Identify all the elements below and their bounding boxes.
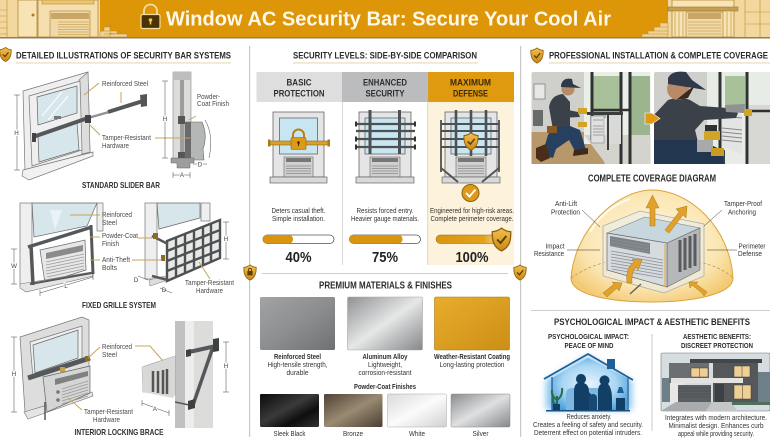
swatch: reinforced steel bbox=[260, 297, 335, 377]
illustration: fixed grille system: L bbox=[64, 283, 68, 290]
block: psychological impact: Reduces anxiety. bbox=[566, 414, 612, 421]
wall and brace bbox=[175, 321, 213, 428]
illustration: fixed grille system: Powder-Coat bbox=[102, 231, 138, 240]
icon: check badge bbox=[462, 184, 479, 202]
callouts: Resistance bbox=[534, 249, 564, 258]
block: psychological impact: Creates a feeling of safety and security. bbox=[533, 422, 643, 429]
illustration: standard slider bar: Tamper-Resistant bbox=[102, 133, 151, 142]
callouts: Anchoring bbox=[728, 208, 756, 216]
illustration: interior locking brace: Steel bbox=[102, 350, 117, 359]
illustration: interior locking brace: Reinforced bbox=[102, 342, 132, 351]
column: basic protection: Simple installation. bbox=[272, 216, 325, 223]
icon: check shield right bbox=[514, 265, 526, 280]
illustration: fixed grille system: D bbox=[134, 277, 139, 284]
title: Window AC Security Bar: Secure Your Cool Air bbox=[166, 8, 611, 30]
block: aesthetic benefits bbox=[661, 332, 770, 438]
illustration: interior locking brace: Hardware bbox=[93, 415, 120, 424]
section view bbox=[173, 72, 191, 160]
callouts: Anti-Lift bbox=[555, 199, 577, 208]
icon: house with family bbox=[544, 354, 633, 412]
block: psychological impact: Deterrent effect on potential intruders. bbox=[534, 430, 642, 437]
labels: Reinforced Steel bbox=[102, 79, 148, 88]
caption: FIXED GRILLE SYSTEM bbox=[82, 300, 156, 310]
swatch: reinforced steel: High-tensile strength, bbox=[268, 362, 328, 369]
right view bbox=[145, 203, 157, 279]
illustration: fixed grille system: Steel bbox=[102, 218, 117, 227]
panel: psychological and aesthetic benefits bbox=[531, 310, 770, 438]
column: basic protection bbox=[256, 72, 342, 266]
callouts: Tamper-Proof bbox=[724, 199, 762, 208]
progress bar: 40% bbox=[263, 235, 334, 244]
illustration: standard slider bar: D bbox=[198, 162, 203, 168]
callouts bbox=[534, 199, 766, 258]
heading: materials: PREMIUM MATERIALS & FINISHES bbox=[319, 280, 452, 292]
callouts: Perimeter bbox=[738, 242, 766, 250]
icon: window with bars bbox=[356, 110, 415, 183]
progress bar: 75% bbox=[350, 235, 420, 244]
callouts: Protection bbox=[551, 208, 580, 216]
heading: coverage diagram: COMPLETE COVERAGE DIAGRAM bbox=[588, 174, 716, 184]
column: enhanced security: Heavier gauge materials. bbox=[351, 216, 419, 223]
illustration: standard slider bar: H bbox=[14, 130, 19, 137]
finish: white bbox=[388, 394, 446, 438]
illustration: interior locking brace: H bbox=[12, 371, 16, 378]
illustration: fixed grille system: Anti-Theft bbox=[102, 255, 130, 264]
illustration: fixed grille system: W bbox=[11, 263, 17, 270]
icon: header padlock bbox=[141, 4, 160, 28]
column: enhanced security: Resists forced entry. bbox=[356, 208, 414, 215]
chart: coverage dome diagram bbox=[534, 190, 766, 302]
column: maximum defense: Complete perimeter coverage. bbox=[430, 216, 514, 223]
finish: silver: Silver bbox=[472, 431, 489, 438]
block: aesthetic benefits: DISCREET PROTECTION bbox=[681, 341, 753, 350]
illustration: modern house bbox=[661, 353, 770, 411]
column: basic protection: BASIC bbox=[286, 78, 312, 88]
illustration: fixed grille system: Bolts bbox=[102, 263, 117, 272]
illustration: fixed grille system: Tamper-Resistant bbox=[185, 278, 234, 287]
column: basic protection: PROTECTION bbox=[274, 88, 324, 98]
swatch: aluminum alloy: Aluminum Alloy bbox=[362, 352, 408, 361]
swatch: aluminum alloy: corrosion-resistant bbox=[358, 370, 412, 377]
swatch: aluminum alloy bbox=[348, 297, 422, 377]
subheading: powder-coat finishes: Powder-Coat Finishes bbox=[354, 382, 416, 391]
column: maximum defense: DEFENSE bbox=[453, 88, 488, 98]
column: enhanced security: 75% bbox=[372, 250, 398, 266]
block: psychological impact: PSYCHOLOGICAL IMPACT: bbox=[548, 332, 629, 341]
icon: window with padlock bbox=[268, 112, 330, 183]
progress bar: 100% bbox=[436, 228, 511, 251]
swatch: weather-resistant coating: Weather-Resistant Coating bbox=[434, 352, 510, 361]
illustration: standard slider bar: H bbox=[163, 116, 167, 123]
header illustration: left house bbox=[0, 0, 127, 37]
panel: security levels comparison bbox=[256, 50, 514, 266]
heading: security levels: SECURITY LEVELS: SIDE-BY-SIDE COMPARISON bbox=[293, 50, 477, 62]
header banner bbox=[0, 0, 770, 38]
illustration: fixed grille system: Finish bbox=[102, 239, 119, 248]
column: enhanced security: SECURITY bbox=[366, 88, 404, 98]
illustration: fixed grille system bbox=[11, 203, 234, 310]
swatch: weather-resistant coating bbox=[434, 297, 510, 369]
caption: STANDARD SLIDER BAR bbox=[82, 180, 160, 190]
illustration: standard slider bar: A bbox=[180, 172, 185, 179]
column: basic protection: 40% bbox=[286, 250, 312, 266]
illustration: fixed grille system: Reinforced bbox=[102, 210, 132, 219]
column: enhanced security bbox=[342, 72, 428, 266]
photo: close-up of bar fastening bbox=[654, 72, 770, 164]
illustration: fixed grille system: D bbox=[162, 287, 167, 294]
panel: professional installation bbox=[531, 48, 770, 302]
photo: technician installing bar bbox=[532, 72, 650, 164]
caption: INTERIOR LOCKING BRACE bbox=[74, 427, 164, 437]
block: aesthetic benefits: AESTHETIC BENEFITS: bbox=[683, 332, 751, 341]
illustration: standard slider bar: Hardware bbox=[102, 141, 129, 150]
column: maximum defense bbox=[428, 72, 514, 266]
icon: shield check bbox=[531, 48, 543, 63]
column: enhanced security: ENHANCED bbox=[363, 78, 407, 88]
callouts: Impact bbox=[546, 242, 564, 250]
column: maximum defense: MAXIMUM bbox=[450, 78, 491, 88]
panel: detailed illustrations bbox=[0, 47, 234, 437]
illustration: interior locking brace: A bbox=[153, 406, 158, 413]
illustration: interior locking brace bbox=[11, 317, 229, 437]
column: maximum defense: 100% bbox=[456, 250, 489, 266]
illustration: interior locking brace: H bbox=[224, 363, 228, 370]
icon: lock shield left bbox=[244, 265, 256, 280]
illustration: standard slider bar bbox=[14, 72, 229, 190]
block: psychological impact bbox=[533, 332, 643, 437]
finish: bronze: Bronze bbox=[343, 431, 363, 438]
block: psychological impact: PEACE OF MIND bbox=[564, 341, 614, 350]
finish: silver bbox=[451, 394, 510, 438]
swatch: reinforced steel: Reinforced Steel bbox=[274, 352, 321, 361]
finish: bronze bbox=[324, 394, 382, 438]
block: aesthetic benefits: Minimalist design. Enhances curb bbox=[668, 423, 764, 430]
panel: premium materials bbox=[244, 265, 526, 438]
column: basic protection: Deters casual theft. bbox=[272, 208, 326, 215]
finish: white: White bbox=[409, 431, 425, 438]
header illustration: right house bbox=[642, 0, 770, 37]
heading: illustrations: DETAILED ILLUSTRATIONS OF SECURITY BAR SYSTEMS bbox=[16, 50, 231, 62]
swatch: weather-resistant coating: Long-lasting protection bbox=[440, 362, 505, 369]
finish: sleek black: Sleek Black bbox=[274, 431, 306, 438]
illustration: standard slider bar: Coat Finish bbox=[197, 99, 229, 108]
callouts: Defense bbox=[738, 249, 762, 258]
finish: sleek black bbox=[260, 394, 319, 438]
icon: fortified window bbox=[441, 110, 500, 183]
illustration: fixed grille system: Hardware bbox=[196, 286, 223, 295]
swatch: aluminum alloy: Lightweight, bbox=[368, 362, 402, 369]
column: maximum defense: Engineered for high-risk areas. bbox=[430, 208, 514, 215]
icon: shield check bbox=[0, 47, 11, 62]
swatch: reinforced steel: durable bbox=[286, 370, 309, 377]
technician bbox=[549, 94, 570, 130]
illustration: fixed grille system: H bbox=[224, 236, 228, 243]
illustration: standard slider bar: Powder- bbox=[197, 92, 221, 101]
arrow: photo sequence bbox=[645, 113, 660, 124]
illustration: interior locking brace: Tamper-Resistant bbox=[84, 407, 133, 416]
